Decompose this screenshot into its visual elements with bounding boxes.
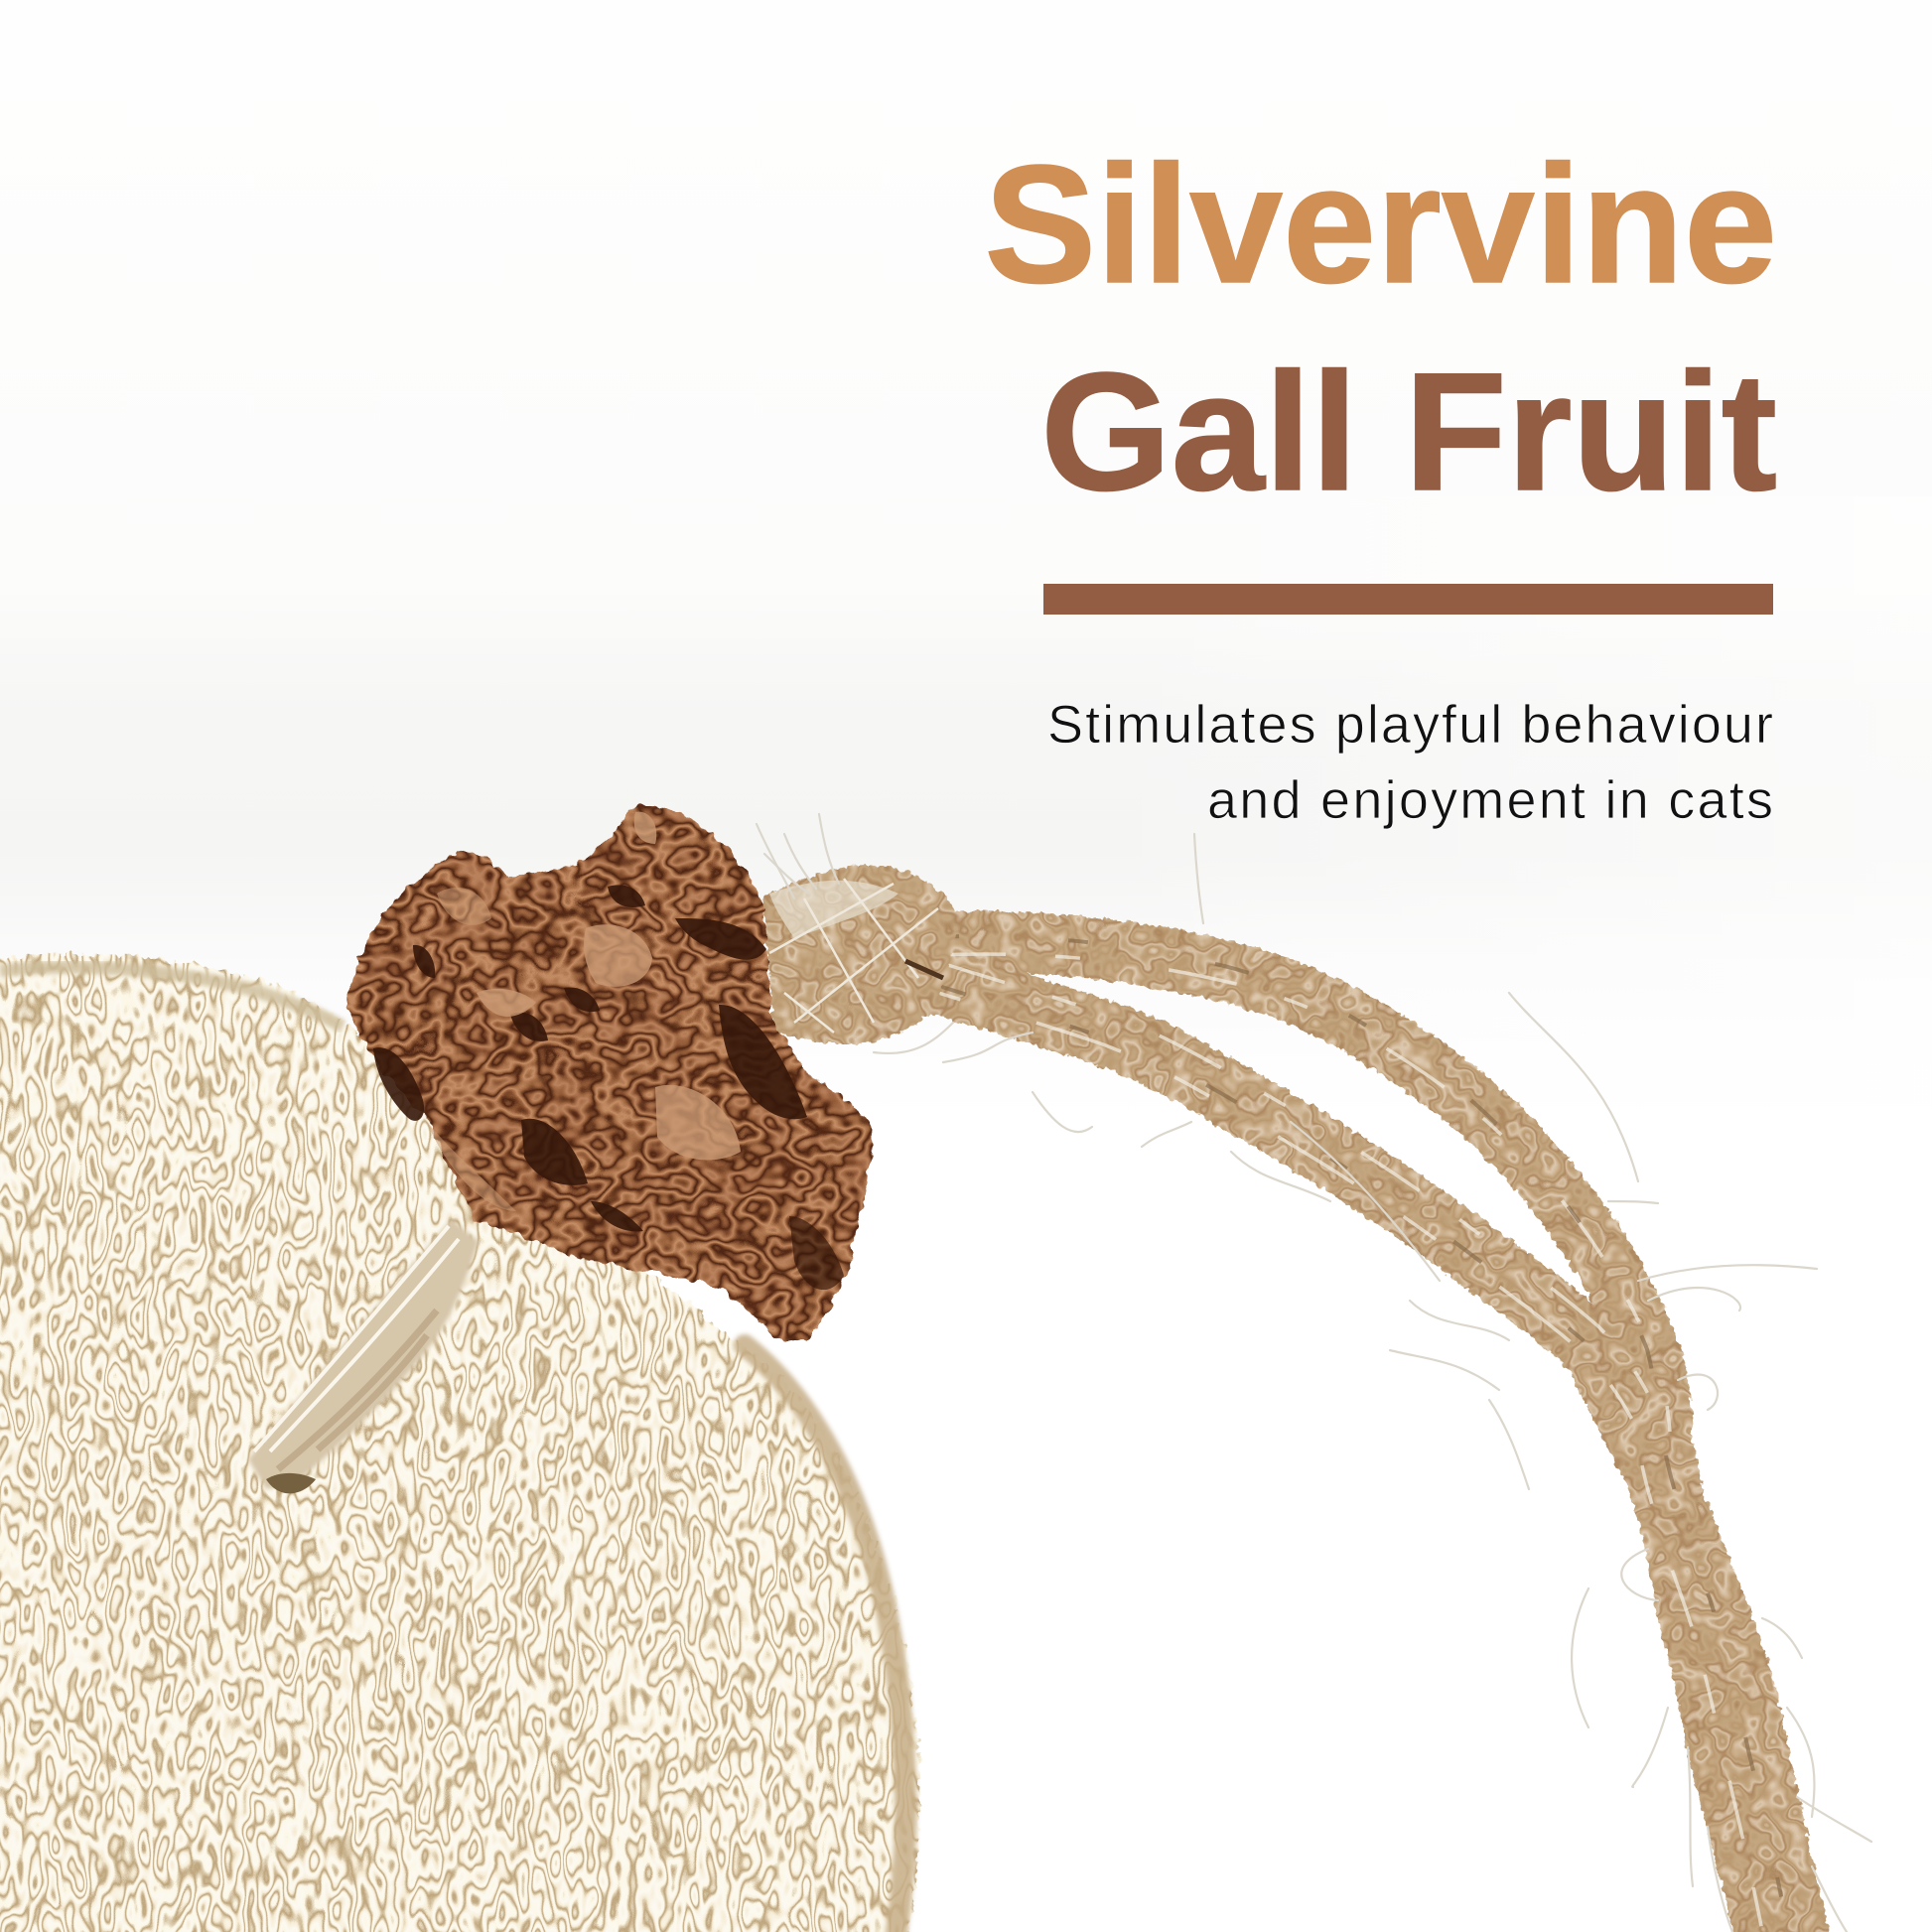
divider bar	[1043, 584, 1773, 615]
loofah tan rim	[745, 1345, 905, 1932]
gall highlights	[427, 812, 741, 1211]
gall dark folds	[373, 885, 844, 1290]
stray fibres	[757, 814, 1871, 1932]
subtitle text	[1047, 695, 1773, 830]
silvervine gall fruit	[346, 805, 874, 1341]
merged rope	[1567, 1366, 1832, 1932]
subtitle line 2: and enjoyment in cats	[1207, 770, 1773, 830]
title line 1: Silvervine	[984, 130, 1777, 318]
loofah sponge pad	[0, 954, 919, 1932]
twine stub on loofah	[248, 1219, 479, 1493]
rope dark twist streaks	[924, 936, 1792, 1932]
loofah tan top edge	[0, 967, 343, 1027]
jute rope loop	[922, 936, 1832, 1932]
title line 2: Gall Fruit	[1040, 338, 1777, 525]
lower rope strand	[928, 978, 1638, 1410]
upper rope strand	[928, 942, 1662, 1420]
rope knot	[762, 865, 957, 1044]
rope white fibre streaks	[922, 954, 1768, 1932]
title: Silvervine Gall Fruit	[984, 130, 1777, 525]
subtitle line 1: Stimulates playful behaviour	[1047, 695, 1773, 755]
